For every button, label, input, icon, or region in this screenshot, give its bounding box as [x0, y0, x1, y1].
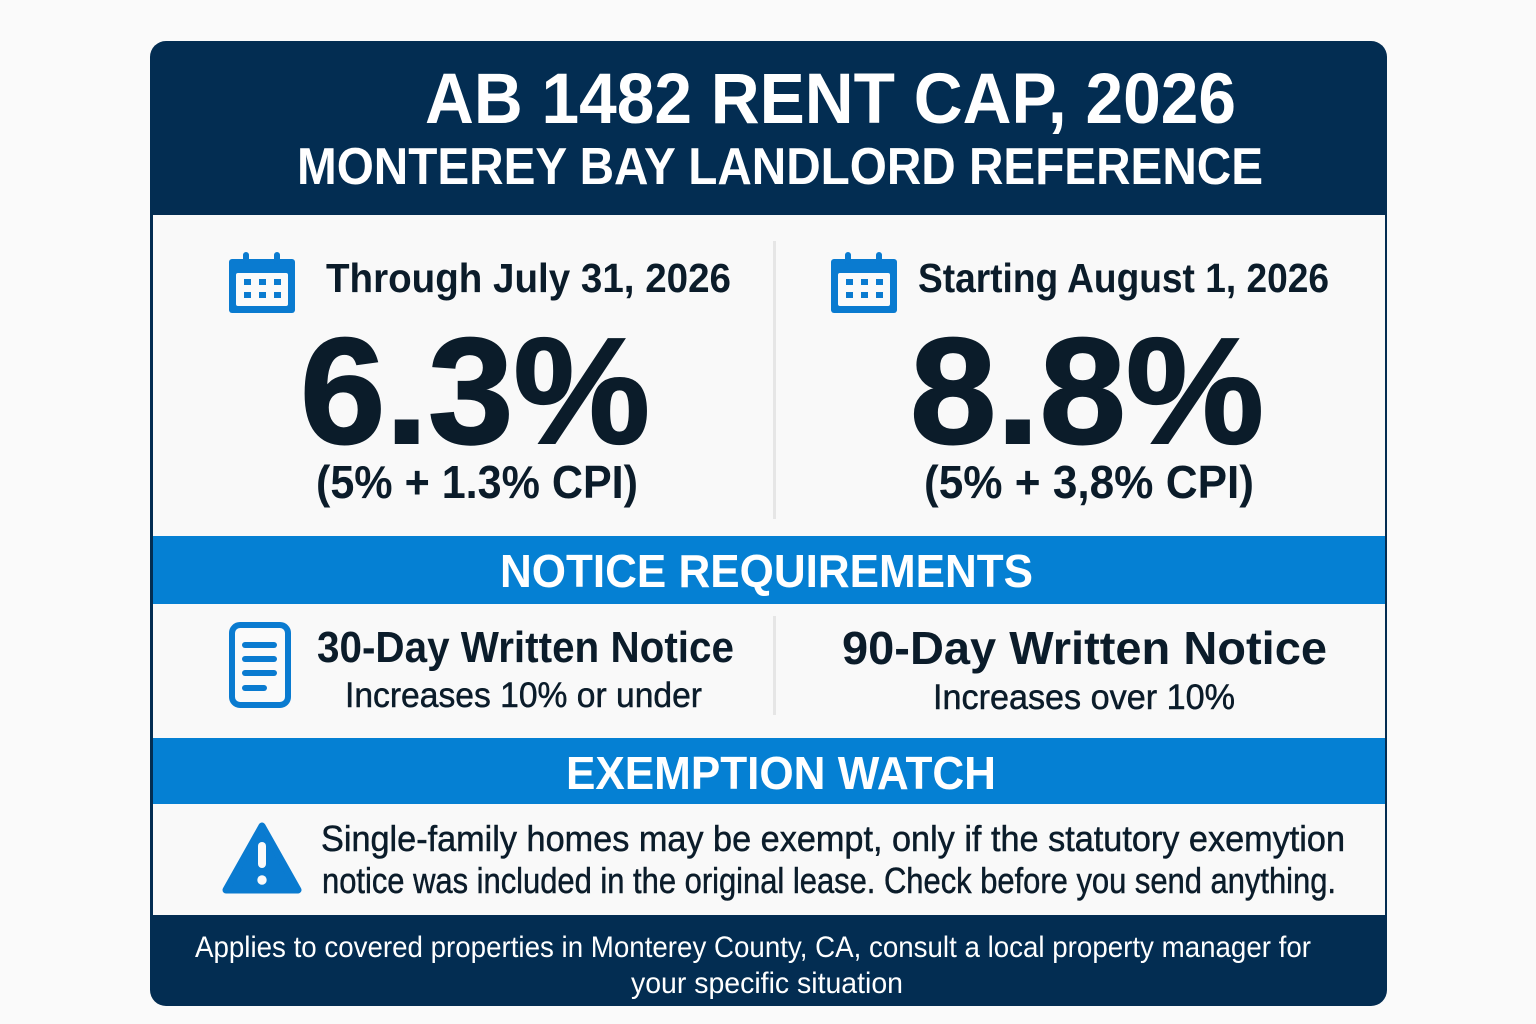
- footer note: your specific situation: [631, 967, 903, 1000]
- section heading: exemption watch: [153, 738, 1385, 804]
- panel: 30-day notice: [232, 623, 734, 715]
- section heading: notice requirements: NOTICE REQUIREMENTS: [500, 545, 1033, 597]
- panel: rate starting August 1: [831, 252, 1329, 508]
- footer note: [195, 931, 1311, 1000]
- icon: warning triangle: [226, 826, 298, 890]
- title block: [297, 60, 1263, 196]
- panel: exemption text: [226, 818, 1345, 901]
- subtitle: MONTEREY BAY LANDLORD REFERENCE: [297, 138, 1263, 196]
- icon: document: [232, 625, 288, 705]
- rate formula: (5% + 1.3% CPI): [316, 456, 638, 508]
- date label: Through July 31, 2026: [326, 255, 731, 301]
- notice heading: 90-Day Written Notice: [842, 622, 1327, 674]
- exemption text line 1: Single-family homes may be exempt, only if the statutory exemytion: [321, 818, 1345, 859]
- section heading: notice requirements: [153, 536, 1385, 604]
- panel: main card: [150, 41, 1387, 1006]
- rate value: 6.3%: [300, 306, 650, 475]
- rate formula: (5% + 3,8% CPI): [924, 456, 1254, 508]
- date label: Starting August 1, 2026: [918, 255, 1329, 301]
- title: AB 1482 RENT CAP, 2026: [425, 60, 1236, 139]
- footer note: Applies to covered properties in Monterey County, CA, consult a local property manager for: [195, 931, 1311, 964]
- divider: [773, 241, 776, 519]
- panel: rate through July 31: [229, 252, 731, 508]
- notice detail: Increases over 10%: [933, 678, 1235, 717]
- section heading: exemption watch: EXEMPTION WATCH: [566, 747, 996, 799]
- notice heading: 30-Day Written Notice: [317, 623, 734, 672]
- notice detail: Increases 10% or under: [345, 676, 702, 715]
- panel: 90-day notice: [842, 622, 1327, 717]
- icon: calendar: [831, 252, 897, 313]
- exemption text line 2: notice was included in the original lease. Check before you send anything.: [322, 860, 1336, 901]
- rate value: 8.8%: [910, 306, 1264, 475]
- icon: calendar: [229, 252, 295, 313]
- divider: [773, 616, 776, 715]
